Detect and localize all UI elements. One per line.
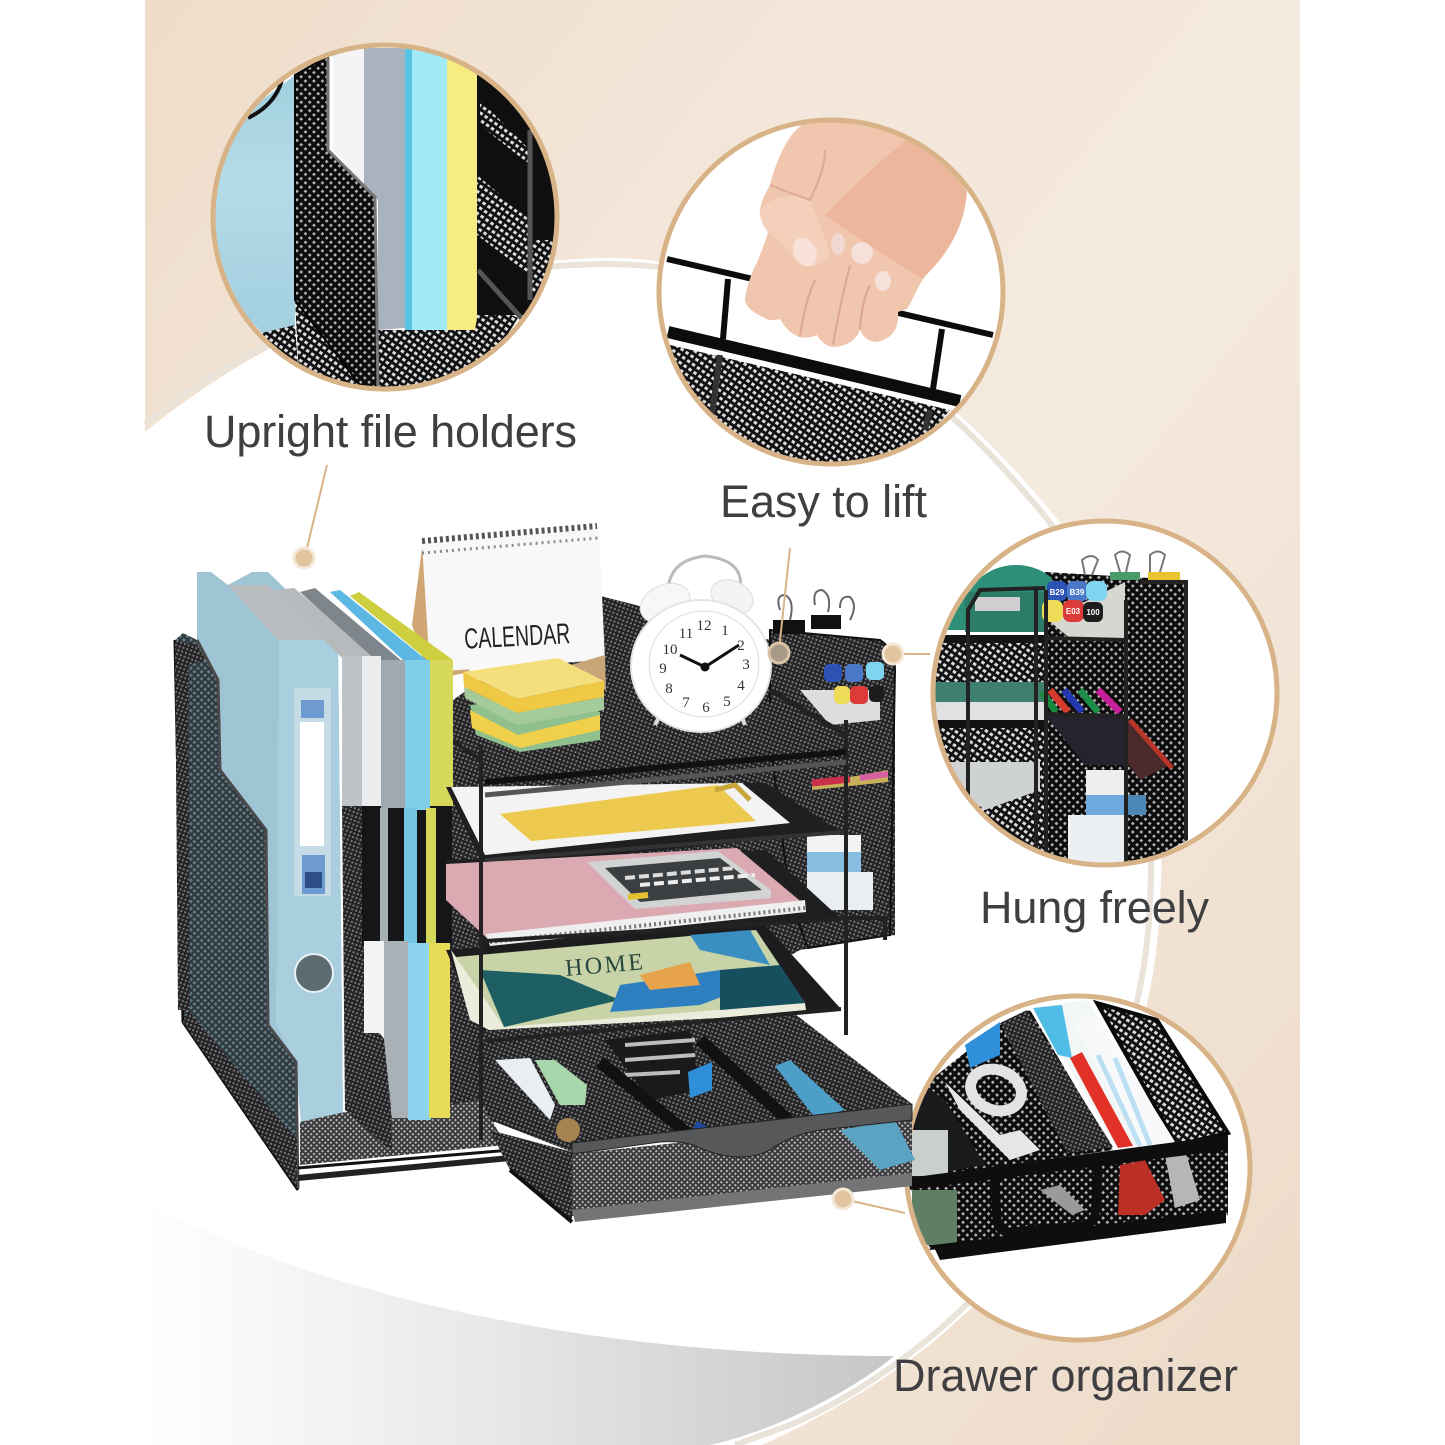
pens	[1033, 1000, 1175, 1148]
product: desk organizer	[175, 526, 915, 1222]
clock numerals: 12	[696, 618, 712, 634]
white rounded backdrop	[145, 258, 1162, 1356]
clock numerals: 10	[662, 642, 678, 658]
finger nails	[793, 238, 817, 266]
sticky notes	[463, 658, 604, 752]
divider mesh panel	[1000, 1010, 1113, 1153]
detail circle: easy to lift	[659, 120, 1003, 470]
marker caps	[1042, 581, 1107, 622]
clock numerals: 11	[679, 626, 693, 642]
calendar word: CALENDAR	[463, 618, 571, 656]
drawer interior mesh	[905, 1010, 1113, 1180]
upper pen pocket	[1048, 582, 1125, 640]
book title: HOME	[564, 949, 644, 982]
tray 2 with clipboard	[446, 783, 841, 868]
circle ring: easy to lift	[659, 120, 1003, 464]
tray 4 with home book	[446, 925, 841, 1045]
white edge band of backdrop	[700, 1300, 968, 1445]
label: easy to lift: Easy to lift	[720, 476, 927, 527]
blue clip	[965, 1022, 1000, 1068]
drawer lip	[572, 1104, 912, 1157]
colourful book seen through mesh	[912, 1190, 957, 1245]
side mesh wall	[1045, 572, 1188, 870]
label: drawer organizer: Drawer organizer	[893, 1350, 1238, 1401]
binder cover	[216, 76, 295, 333]
scissors	[945, 1062, 1040, 1160]
red clip in front	[1118, 1160, 1165, 1215]
left wall mesh	[912, 1088, 985, 1178]
tape	[807, 835, 861, 853]
circle ring: drawer organizer	[906, 996, 1250, 1340]
metal handle frame	[667, 259, 993, 430]
marker caps: B39	[1070, 588, 1085, 597]
right wall mesh	[1097, 1003, 1228, 1145]
marker caps	[824, 662, 884, 704]
detail circle: drawer organizer	[905, 996, 1250, 1340]
drawer	[451, 1014, 915, 1222]
side hanging pocket	[770, 590, 895, 948]
detail circle: upright file holders	[205, 45, 562, 395]
tray 3 with pink notebook and calculator	[446, 848, 841, 950]
dark pocket and pencils	[1045, 715, 1125, 765]
callout: file holders pointer	[294, 465, 327, 568]
clock numerals: 1	[721, 623, 729, 639]
front mesh	[910, 1148, 1228, 1250]
drawer front mesh	[572, 1118, 912, 1216]
clock numerals: 6	[702, 700, 710, 716]
marker caps: E03	[1066, 607, 1081, 616]
label: hung freely: Hung freely	[980, 882, 1210, 933]
scissor blade seen through front	[1040, 1185, 1085, 1215]
floor mesh	[262, 302, 518, 386]
clock numerals	[659, 618, 750, 716]
drawer floor	[451, 1014, 912, 1152]
pencils	[812, 770, 888, 790]
paper clip box	[807, 872, 873, 910]
calendar	[412, 526, 606, 690]
green calendar shape	[940, 565, 1052, 630]
clips	[1082, 552, 1165, 575]
circle ring: file holders	[213, 45, 557, 389]
marker caps: B29	[1050, 588, 1065, 597]
callout: hanging pointer	[883, 644, 930, 664]
circle ring: hung freely	[933, 521, 1277, 865]
binder finger hole	[295, 954, 333, 992]
beige background panel	[145, 0, 1300, 1445]
alarm clock	[631, 556, 771, 732]
clock numerals: 2	[737, 638, 745, 654]
rear mesh	[477, 75, 562, 315]
label: upright file holders: Upright file holders	[204, 406, 577, 457]
clock numerals: 9	[659, 661, 667, 677]
side mesh	[490, 1130, 572, 1222]
wire frame posts and rails	[454, 690, 846, 1140]
binder clips	[778, 590, 854, 620]
clock numerals: 5	[723, 694, 731, 710]
back mesh wall	[446, 596, 895, 1130]
clock numerals: 3	[742, 657, 750, 673]
file folders	[275, 588, 453, 1152]
binder label	[294, 688, 331, 896]
detail circle: hung freely	[933, 521, 1277, 870]
callout: lift pointer	[769, 548, 790, 663]
background mesh	[936, 643, 1044, 852]
main binder	[197, 572, 343, 1122]
front band	[908, 1135, 1228, 1190]
left mesh holder	[175, 633, 298, 1190]
marker caps: 100	[1086, 608, 1100, 617]
tape and clips box	[1086, 770, 1126, 796]
clock numerals: 7	[682, 695, 690, 711]
callout: drawer pointer	[833, 1189, 905, 1213]
clock numerals: 4	[737, 678, 745, 694]
base floor and rail	[298, 1100, 510, 1178]
mesh divider	[295, 56, 378, 388]
mesh tray	[670, 345, 950, 470]
grey shadow under the white shape	[145, 1202, 894, 1445]
clock numerals: 8	[665, 681, 673, 697]
hand	[745, 121, 967, 347]
drawer contents	[495, 1030, 845, 1160]
folders	[333, 48, 477, 333]
calculator	[587, 851, 771, 909]
tray 1 surface	[454, 697, 841, 787]
wire frame	[968, 582, 1186, 870]
